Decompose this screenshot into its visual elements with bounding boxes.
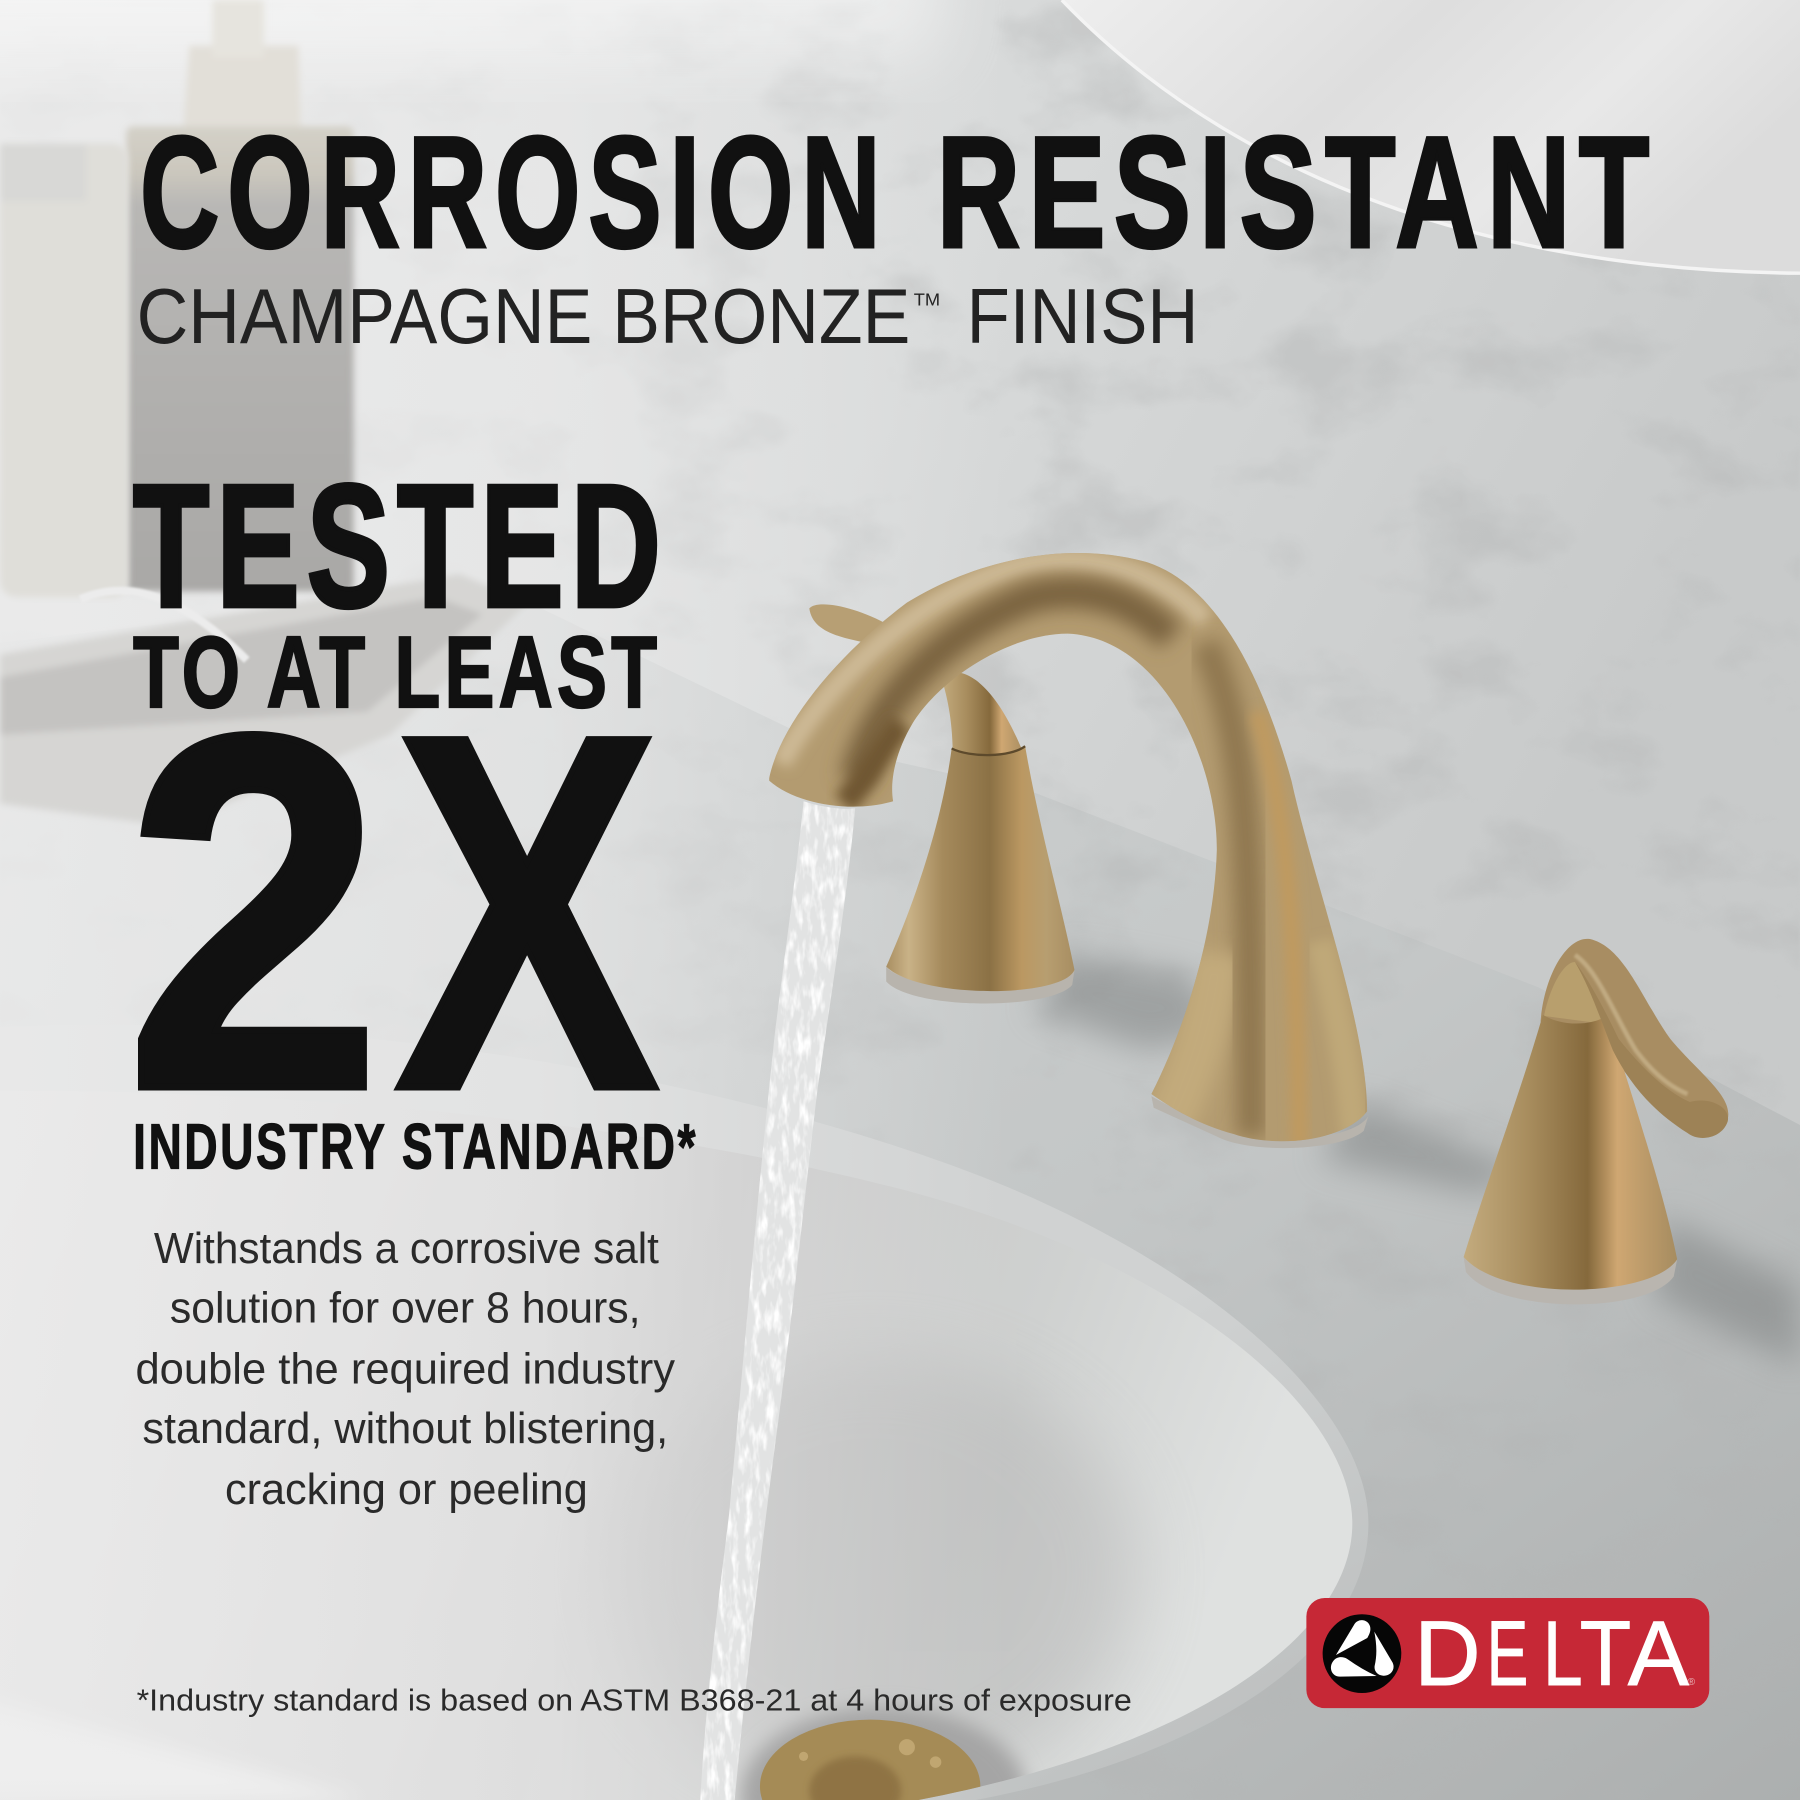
subtitle <box>137 272 1198 360</box>
soft top-left glow <box>0 0 941 57</box>
body text: cracking or peeling <box>225 1466 588 1514</box>
body text: Withstands a corrosive salt <box>154 1225 659 1273</box>
sink rim <box>0 1025 1368 1800</box>
left handle base <box>886 967 1074 1003</box>
gold drain <box>740 1707 1027 1800</box>
numeral 2: 2 <box>125 631 382 1195</box>
logo wordmark: D <box>1414 1603 1481 1705</box>
water texture <box>700 802 853 1800</box>
letter X: X <box>395 631 661 1195</box>
body text: solution for over 8 hours, <box>170 1284 641 1332</box>
title word: corrosion: CORROSION <box>140 104 889 281</box>
body text <box>135 1225 675 1514</box>
trademark: TM <box>914 289 940 309</box>
sink basin <box>0 1091 1352 1800</box>
basin shading <box>0 1355 1136 1800</box>
logo icon: black circle with three white petals <box>1323 1614 1401 1693</box>
logo red panel <box>1306 1598 1709 1708</box>
spout base <box>1151 1096 1368 1148</box>
left handle seam <box>952 746 1025 755</box>
blurred soap tray <box>0 574 528 827</box>
heading: tested: TESTED <box>133 448 668 643</box>
left handle lever <box>809 604 890 645</box>
heading: industry standard: INDUSTRY STANDARD* <box>133 1111 698 1183</box>
faucet shadows on counter <box>1033 953 1800 1366</box>
right lever neck shade <box>1544 962 1605 1024</box>
heading: to at least: TO AT LEAST <box>133 617 661 729</box>
subtitle champagne bronze: CHAMPAGNE BRONZE <box>137 272 910 360</box>
logo wordmark: E <box>1487 1602 1528 1705</box>
body text: double the required industry <box>135 1345 675 1393</box>
mirror rim <box>1062 0 1800 273</box>
logo wordmark: T <box>1580 1602 1631 1705</box>
right lever highlight <box>1575 955 1688 1094</box>
footnote: *Industry standard is based on ASTM B368-21 at 4 hours of exposure <box>137 1682 1132 1717</box>
body text: standard, without blistering, <box>142 1405 668 1453</box>
water stream <box>700 802 855 1800</box>
counter top <box>0 585 1800 1800</box>
big number 2X <box>125 631 661 1195</box>
right handle cone <box>1464 1015 1677 1290</box>
marble wall <box>0 0 1800 1148</box>
blurred glass jar <box>0 143 129 597</box>
logo wordmark: L <box>1543 1603 1583 1705</box>
left handle neck <box>941 672 1025 758</box>
spout with tube shading <box>758 540 1378 1159</box>
subtitle finish: FINISH <box>967 272 1198 360</box>
logo wordmark: A <box>1628 1603 1690 1705</box>
registered mark: ® <box>1688 1677 1696 1688</box>
left handle cone <box>886 746 1074 991</box>
faucet <box>758 540 1728 1304</box>
round mirror at top right <box>1062 0 1800 273</box>
white rope soap detail <box>80 591 247 660</box>
logo: Delta <box>1306 1598 1709 1708</box>
right handle base <box>1464 1257 1677 1304</box>
title <box>140 104 1658 281</box>
logo wordmark <box>1414 1602 1690 1705</box>
right lever ribbon over cone <box>1575 962 1728 1138</box>
blurred soap dispenser <box>126 0 354 591</box>
right handle neck and lever <box>1541 939 1728 1137</box>
